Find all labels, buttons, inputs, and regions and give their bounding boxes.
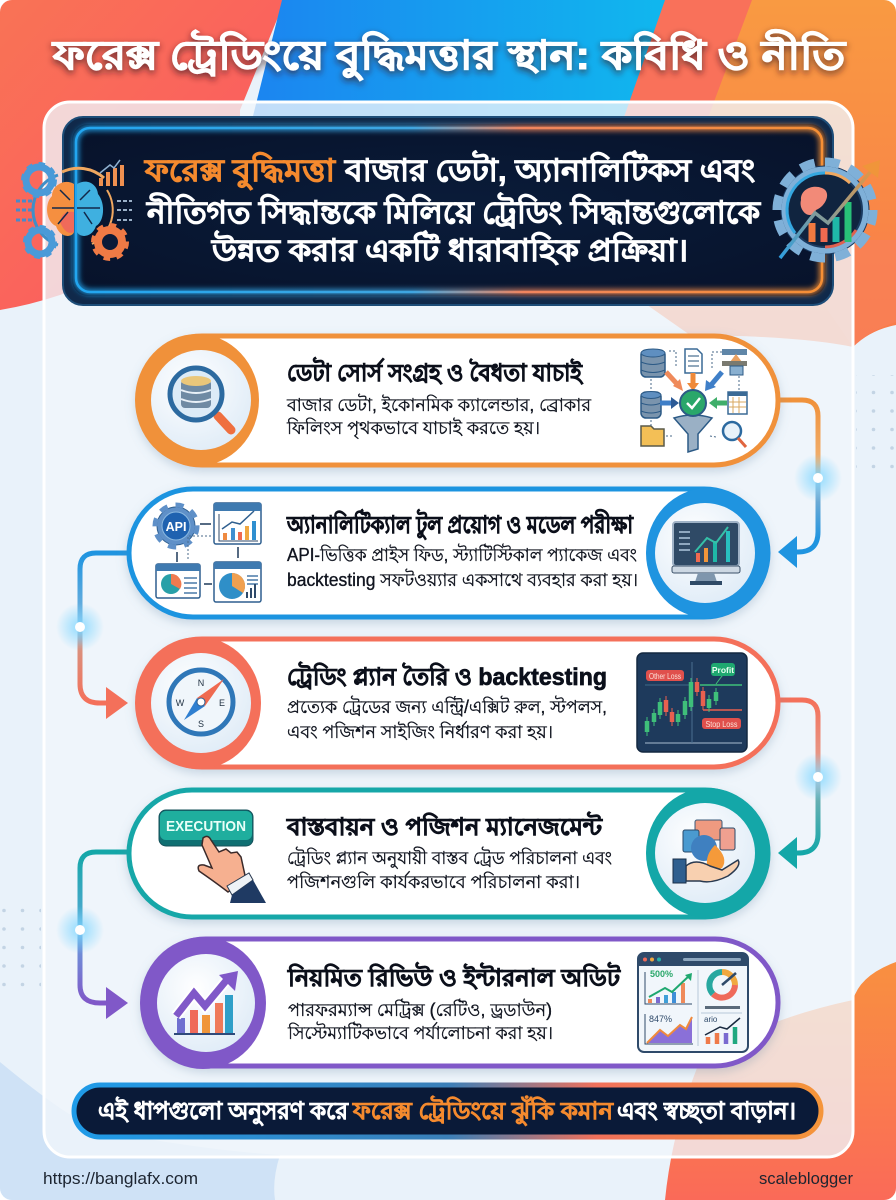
connector arrow 3 xyxy=(778,700,842,869)
step 3 text: ট্রেডিং প্ল্যান তৈরি ও backtesting xyxy=(287,661,607,691)
icon: API gear with dashboards xyxy=(155,503,261,602)
icon: brain with gears xyxy=(16,160,132,259)
connector arrow 4 xyxy=(56,852,128,1019)
icon: magnifier on database xyxy=(170,368,231,430)
icon: compass: E xyxy=(219,698,225,708)
step 4 text: ট্রেডিং প্ল্যান অনুযায়ী বাস্তব ট্রেড পরিচালনা এবং xyxy=(287,847,612,868)
step 1 text: বাজার ডেটা, ইকোনমিক ক্যালেন্ডার, ব্রোকার xyxy=(286,394,592,415)
icon: API gear with dashboards: API xyxy=(166,520,186,534)
step 5 text xyxy=(287,962,621,1043)
step 1 text xyxy=(286,357,592,440)
step 1 text: ফিলিংস পৃথকভাবে যাচাই করতে হয়। xyxy=(286,418,540,440)
connector arrow 1 xyxy=(778,400,842,568)
header text xyxy=(144,150,761,268)
footer callout: ফরেক্স ট্রেডিংয়ে ঝুঁকি কমান xyxy=(352,1095,615,1126)
step 1 text: ডেটা সোর্স সংগ্রহ ও বৈধতা যাচাই xyxy=(287,357,583,387)
icon: execution button with pointing hand: EXECUTION xyxy=(166,818,246,835)
header text: ফরেক্স বুদ্ধিমত্তা xyxy=(144,151,336,190)
title: ফরেক্স ট্রেডিংয়ে বুদ্ধিমত্তার স্থান: কবিধি ও নীতি xyxy=(51,29,847,81)
icon: analytics dashboard xyxy=(638,953,748,1052)
step 2 panel xyxy=(129,488,770,618)
step 5 panel xyxy=(140,937,778,1069)
step 4 text xyxy=(286,811,612,892)
step 5 text: নিয়মিত রিভিউ ও ইন্টারনাল অডিট xyxy=(287,962,621,992)
step 1 panel xyxy=(135,334,778,466)
step 5 text: সিস্টেম্যাটিকভাবে পর্যালোচনা করা হয়। xyxy=(287,1022,553,1043)
header text: বাজার ডেটা, অ্যানালিটিকস এবং xyxy=(344,150,755,188)
footer callout: এবং স্বচ্ছতা বাড়ান। xyxy=(617,1098,796,1125)
icon: rising bars with arrow xyxy=(174,971,238,1034)
step 4 text: বাস্তবায়ন ও পজিশন ম্যানেজমেন্ট xyxy=(286,811,603,841)
icon: compass xyxy=(169,670,233,734)
icon: analytics dashboard: 847% xyxy=(649,1014,672,1024)
icon: data sources into funnel xyxy=(641,349,747,452)
footer callout xyxy=(74,1085,821,1137)
icon: compass: N xyxy=(198,678,204,688)
icon: compass: W xyxy=(176,698,185,708)
icon: candlestick chart: Profit xyxy=(712,665,734,675)
icon: candlestick chart xyxy=(637,653,747,752)
icon: candlestick chart: Other Loss xyxy=(649,671,681,681)
icon: compass: S xyxy=(198,719,204,729)
step 3 text: প্রত্যেক ট্রেডের জন্য এন্ট্রি/এক্সিট রুল, স্টপলস, xyxy=(287,696,607,717)
icon: analytics dashboard: 500% xyxy=(650,969,673,979)
icon: hand holding portfolio xyxy=(673,820,739,883)
step 4 panel xyxy=(129,788,770,918)
connector arrow 2 xyxy=(56,553,128,719)
step 3 panel xyxy=(135,637,778,769)
step 5 text: পারফরম্যান্স মেট্রিক্স (রেটিও, ড্রডাউন) xyxy=(288,999,552,1020)
icon: analytics dashboard: ario xyxy=(704,1015,718,1024)
step 2 text: backtesting সফটওয়্যার একসাথে ব্যবহার করা হয়। xyxy=(287,569,638,590)
footer callout: এই ধাপগুলো অনুসরণ করে xyxy=(98,1096,349,1126)
icon: candlestick chart: Stop Loss xyxy=(706,719,738,729)
icon: monitor with chart xyxy=(672,522,740,585)
header text: নীতিগত সিদ্ধান্তকে মিলিয়ে ট্রেডিং সিদ্ধান্তগুলোকে xyxy=(146,192,761,230)
step 4 text: পজিশনগুলি কার্যকরভাবে পরিচালনা করা। xyxy=(287,871,580,892)
step 2 text: অ্যানালিটিক্যাল টুল প্রয়োগ ও মডেল পরীক্ষা xyxy=(286,509,634,540)
icon: gear with chart xyxy=(777,160,880,258)
step 2 text: API-ভিত্তিক প্রাইস ফিড, স্ট্যাটিস্টিকাল প্যাকেজ এবং xyxy=(287,544,637,565)
source url: https://banglafx.com xyxy=(43,1169,198,1188)
step 2 text xyxy=(286,509,638,590)
icon: execution button with pointing hand xyxy=(159,810,266,903)
step 3 text: এবং পজিশন সাইজিং নির্ধারণ করা হয়। xyxy=(287,721,553,742)
brand credit: scaleblogger xyxy=(759,1169,853,1188)
step 3 text xyxy=(287,661,607,742)
main panel xyxy=(44,102,853,1157)
header text: উন্নত করার একটি ধারাবাহিক প্রক্রিয়া। xyxy=(211,230,688,268)
header box xyxy=(63,117,833,305)
